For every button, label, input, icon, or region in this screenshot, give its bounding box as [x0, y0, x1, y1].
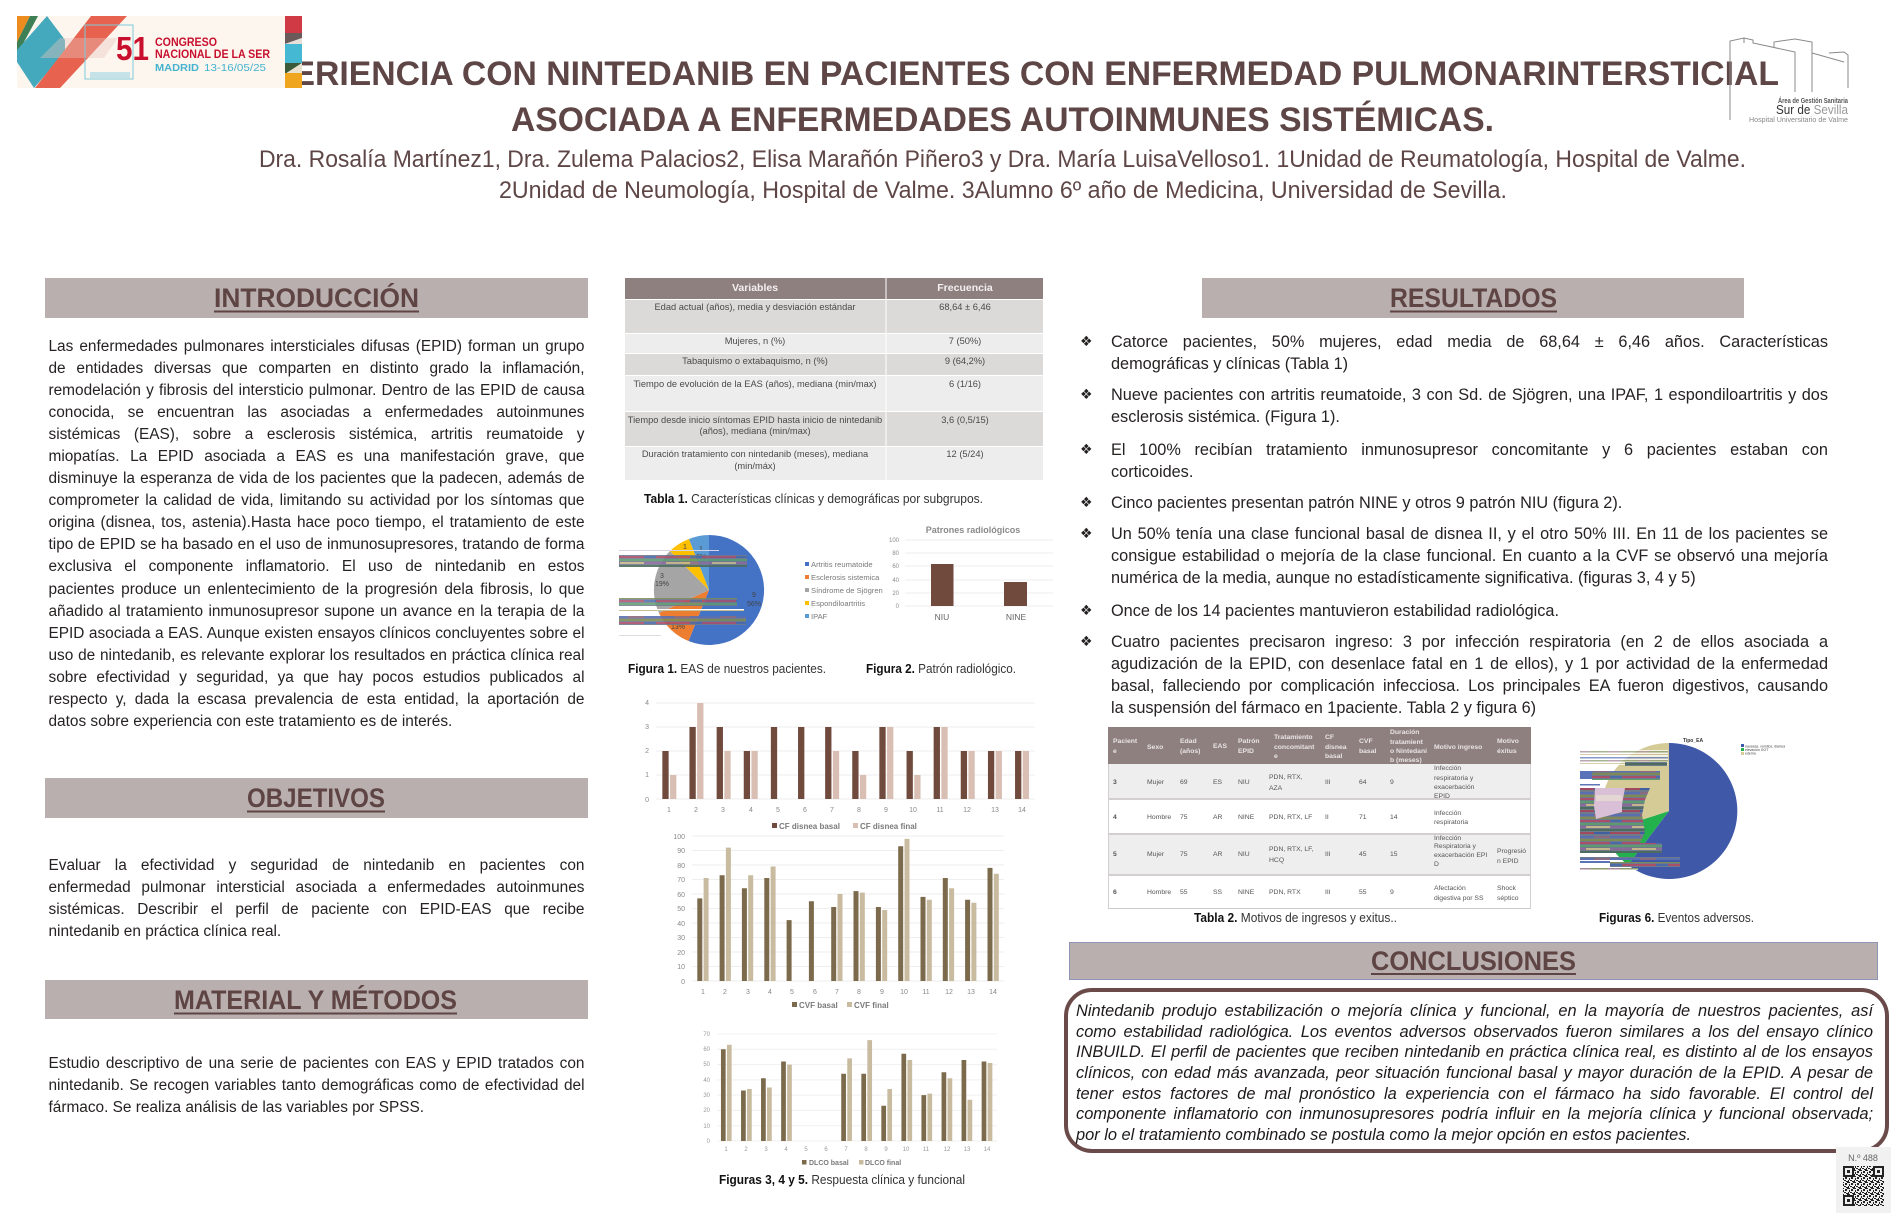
- text: introducción: de entidades diversas que comparten en distinto grado la inflamación,: [48, 360, 584, 377]
- text: resultado 5: consigue estabilidad o mejoría de la clase funcional. En cuanto a la CVF se observó una mejoría: [1111, 547, 1828, 565]
- chart: figura 5 dlco: 30: [703, 1093, 711, 1099]
- chart: figura 4 cvf: 14: [989, 989, 997, 996]
- chart: figura 4 cvf: 80: [677, 863, 685, 870]
- chart: figura 4 cvf: 1: [701, 989, 705, 996]
- logo: congress: CONGRESO: [155, 37, 217, 49]
- chart: figura 4 cvf: 50: [677, 906, 685, 913]
- table 1: Variables: [732, 282, 778, 294]
- text: resultado 6: Once de los 14 pacientes mantuvieron estabilidad radiológica.: [1111, 602, 1559, 620]
- chart: figura 3 cf disnea: 14: [1018, 807, 1026, 814]
- text: introducción: remodelación y fibrosis del intersticio pulmonar. Dentro de las EPID de causa: [48, 382, 584, 399]
- chart: figura 5 dlco: 60: [703, 1047, 711, 1053]
- table 2: NIU: [1238, 779, 1250, 786]
- table 2: Shock: [1497, 885, 1516, 892]
- panel: conclusion box: [1066, 990, 1887, 1151]
- table 1: 9 (64,2%): [945, 356, 985, 366]
- authors: 2Unidad de Neumología, Hospital de Valme. 3Alumno 6º año de Medicina, Universidad de Sevilla.: [499, 177, 1507, 204]
- chart: figura 2 bars: NINE: [1006, 612, 1026, 622]
- table 2: tratamient: [1390, 739, 1424, 746]
- chart: figura 4 cvf: 20: [677, 950, 685, 957]
- text: resultado 7: Cuatro pacientes precisaron ingreso: 3 por infección respiratoria (en 2 de ellos asociada a: [1111, 633, 1828, 651]
- chart: figura 6 pie: Tipo_EA: [1683, 738, 1703, 744]
- table 2: Edad: [1180, 738, 1197, 745]
- table 2: 4: [1113, 814, 1117, 821]
- legend: figura 1: IPAF: [811, 612, 828, 621]
- chart: figura 3 cf disnea: 1: [667, 807, 671, 814]
- text: introducción: datos sobre experiencia con este tratamiento es de interés.: [48, 713, 452, 730]
- table 2: basal: [1359, 748, 1376, 755]
- chart: figura 4 cvf: 70: [677, 877, 685, 884]
- text: introducción: sobre efectividad y seguridad, ya que hay pocos estudios publicados al: [48, 669, 584, 686]
- chart: figura 3 cf disnea: CF disnea basal: [779, 822, 840, 831]
- text: material y métodos: [48, 1055, 584, 1116]
- chart: figura 4 cvf: 13: [967, 989, 975, 996]
- qr code: N.º 488: [1848, 1153, 1878, 1163]
- logo: hospital: Sur de Sevilla: [1776, 102, 1849, 117]
- table 2: Hombre: [1147, 889, 1171, 896]
- chart: figura 5 dlco: 6: [824, 1147, 828, 1153]
- chart: figura 4 cvf: 5: [790, 989, 794, 996]
- table 2: PDN, RTX: [1269, 889, 1301, 896]
- text: ❖: [1080, 495, 1093, 511]
- table 2: (años): [1180, 748, 1200, 755]
- legend: figura 1: Esclerosis sistemica: [811, 573, 880, 582]
- logo: congress: [17, 16, 302, 88]
- chart: figura 4 cvf: CVF final: [854, 1001, 889, 1010]
- chart: figura 3 cf disnea: 3: [645, 724, 649, 731]
- table 2: ES: [1213, 779, 1223, 786]
- table 2: CVF: [1359, 738, 1373, 745]
- text: resultado 4: Cinco pacientes presentan patrón NINE y otros 9 patrón NIU (figura 2).: [1111, 494, 1622, 512]
- chart: figura 3 cf disnea: 3: [721, 807, 725, 814]
- chart: figura 5 dlco: 3: [764, 1147, 768, 1153]
- chart: figura 4 cvf: 100: [673, 834, 685, 841]
- chart: figura 6 pie: [1580, 738, 1785, 879]
- chart: figura 5 dlco: 70: [703, 1032, 711, 1038]
- table 2: respiratoria y: [1434, 775, 1474, 782]
- table 1: Frecuencia: [937, 282, 993, 294]
- table 2: o Nintedani: [1390, 748, 1427, 755]
- table 2: 5: [1113, 851, 1117, 858]
- authors: [259, 146, 1746, 204]
- chart: figura 5 dlco: 0: [707, 1139, 711, 1145]
- heading: resultados: [1202, 278, 1744, 318]
- table 2: PDN, RTX,: [1269, 774, 1303, 781]
- table 2: HCQ: [1269, 857, 1284, 864]
- chart: figura 5 dlco: 2: [744, 1147, 748, 1153]
- table 2: 45: [1359, 851, 1367, 858]
- table 2: concomitant: [1274, 744, 1315, 751]
- text: resultado 7: agudización de la EPID, con desenlace fatal en 1 de ellos), y 1 por actividad de la enfermedad: [1111, 655, 1828, 673]
- text: conclusiones: por lo el tratamiento combinado se postula como la mejor opción en estos pacientes.: [1076, 1126, 1691, 1144]
- chart: figura 2 bars: 0: [896, 604, 900, 610]
- caption: figura 2: Figura 2. Patrón radiológico.: [866, 661, 1016, 676]
- logo: congress: MADRID: [155, 62, 199, 74]
- chart: figura 6 pie: edema: [1745, 752, 1756, 756]
- text: resultado 7: [1080, 633, 1828, 717]
- text: ❖: [1080, 526, 1093, 542]
- chart: figura 4 cvf: 10: [900, 989, 908, 996]
- chart: figura 4 cvf: 11: [922, 989, 930, 996]
- chart: figura 1 pie: 1: [683, 544, 687, 551]
- title: [225, 55, 1779, 139]
- table 2: D: [1434, 861, 1439, 868]
- heading: material y métodos: [45, 980, 588, 1019]
- table 2: Patrón: [1238, 738, 1260, 745]
- chart: figura 4 cvf: 9: [880, 989, 884, 996]
- chart: figura 3 cf disnea: CF disnea final: [860, 822, 917, 831]
- chart: figura 5 dlco: 11: [923, 1147, 930, 1153]
- chart: figura 5 dlco: 10: [903, 1147, 910, 1153]
- chart: figura 3 cf disnea: 1: [645, 772, 649, 779]
- text: objetivos: nintedanib en práctica clínica real.: [48, 923, 281, 940]
- table 2: Pacient: [1113, 738, 1138, 745]
- chart: figura 4 cvf: 0: [681, 979, 685, 986]
- chart: figura 5 dlco: 40: [703, 1078, 711, 1084]
- logo: congress: 13-16/05/25: [204, 62, 266, 74]
- table 2: III: [1325, 889, 1331, 896]
- text: introducción: comprometer la calidad de vida, limitando su actividad por los síntomas que: [48, 492, 584, 509]
- table 2: exacerbación: [1434, 784, 1475, 791]
- chart: figura 5 dlco: 12: [944, 1147, 951, 1153]
- table 2: 75: [1180, 851, 1188, 858]
- table 2: PDN, RTX, LF,: [1269, 846, 1314, 853]
- chart: figura 4 cvf: 40: [677, 921, 685, 928]
- text: conclusiones: componente inflamatorio con inmunosupresores podría influir en la mejoría clínica y funcional observada;: [1076, 1105, 1873, 1123]
- chart: figura 3 cf disnea: 2: [694, 807, 698, 814]
- text: conclusiones: [1076, 1002, 1874, 1144]
- chart: figura 5 dlco: 13: [964, 1147, 971, 1153]
- heading: resultados: RESULTADOS: [1390, 283, 1557, 313]
- text: ❖: [1080, 603, 1093, 619]
- text: introducción: EPID asociada a EAS. Aunque existen ensayos clínicos concluyentes sobre el: [48, 625, 584, 642]
- table 2: exacerbación EPI: [1434, 852, 1487, 859]
- table 2: PDN, RTX, LF: [1269, 814, 1312, 821]
- text: introducción: sistémicas (EAS), sobre a esclerosis sistémica, artritis reumatoide y: [48, 426, 584, 443]
- text: resultado 5: [1080, 525, 1828, 587]
- chart: figura 3 cf disnea: 7: [830, 807, 834, 814]
- table 1: Duración tratamiento con nintedanib (meses), mediana: [642, 449, 869, 459]
- table 2: CF: [1325, 734, 1334, 741]
- text: resultado 3: El 100% recibían tratamiento inmunosupresor concomitante y 6 pacientes estaban con: [1111, 440, 1828, 458]
- table 2: Tratamiento: [1274, 734, 1313, 741]
- heading: objetivos: [45, 778, 588, 818]
- chart: figura 4 cvf: 12: [945, 989, 953, 996]
- table 2: Afectación: [1434, 885, 1466, 892]
- table 2: NIU: [1238, 851, 1250, 858]
- table 2: EAS: [1213, 743, 1227, 750]
- table 2: AZA: [1269, 785, 1283, 792]
- chart: figura 2 bars: 60: [892, 564, 900, 570]
- table 2: NINE: [1238, 814, 1255, 821]
- text: conclusiones: Nintedanib produjo estabilización o mejoría clínica y funcional, en la mayoría de nuestros pacientes, así: [1076, 1002, 1873, 1020]
- chart: figura 2 bars: Patrones radiológicos: [926, 525, 1020, 535]
- table 2: [1108, 727, 1531, 909]
- chart: figura 6 pie: nauseas, vómitos, diarrea: [1745, 744, 1785, 748]
- chart: figura 3 cf disnea: 12: [963, 807, 971, 814]
- text: resultado 1: Catorce pacientes, 50% mujeres, edad media de 68,64 ± 6,46 años. Características: [1111, 333, 1828, 351]
- table 2: e: [1274, 753, 1278, 760]
- table 1: Mujeres, n (%): [725, 336, 785, 346]
- text: resultado 7: la suspensión del fármaco en 1paciente. Tabla 2 y figura 6): [1111, 699, 1536, 717]
- authors: Dra. Rosalía Martínez1, Dra. Zulema Palacios2, Elisa Marañón Piñero3 y Dra. María LuisaVelloso1. 1Unidad de Reumatología, Hospital de Valme.: [259, 146, 1746, 173]
- chart: figura 3 cf disnea: 4: [645, 700, 649, 707]
- text: introducción: tipo de EPID se ha basado en el uso de inmunosupresores, tratando de forma: [48, 536, 584, 553]
- caption: figuras 6: Figuras 6. Eventos adversos.: [1599, 910, 1754, 925]
- table 2: respiratoria: [1434, 819, 1468, 826]
- chart: figura 4 cvf: 60: [677, 892, 685, 899]
- text: ❖: [1080, 387, 1093, 403]
- text: ❖: [1080, 442, 1093, 458]
- chart: figura 4 cvf: 30: [677, 935, 685, 942]
- table 2: SS: [1213, 889, 1223, 896]
- title: EXPERIENCIA CON NINTEDANIB EN PACIENTES CON ENFERMEDAD PULMONARINTERSTICIAL: [225, 55, 1779, 93]
- text: material y métodos: nintedanib. Se recogen variables tanto demográficas como de efectividad del: [48, 1077, 584, 1094]
- text: introducción: uso de nintedanib, es relevante explorar los resultados en práctica clínica real: [48, 647, 584, 664]
- chart: figura 5 dlco: 9: [884, 1147, 888, 1153]
- chart: figura 1 pie: 9: [752, 592, 756, 599]
- text: introducción: pacientes produce un enlentecimiento de la progresión dela fibrosis, lo que: [48, 581, 584, 598]
- table 2: EPID: [1434, 793, 1450, 800]
- legend: figura 1: Espondiloartritis: [811, 599, 865, 608]
- table 1: Tiempo de evolución de la EAS (años), mediana (min/max): [633, 379, 877, 389]
- chart: figura 5 dlco: 50: [703, 1062, 711, 1068]
- caption: figuras 3, 4 y 5: Figuras 3, 4 y 5. Respuesta clínica y funcional: [719, 1172, 965, 1187]
- table 1: 3,6 (0,5/15): [941, 415, 989, 425]
- text: resultado 7: basal, falleciendo por complicación infecciosa. Los principales EA fueron digestivos, causando: [1111, 677, 1828, 695]
- table 2: AR: [1213, 851, 1223, 858]
- table 2: disnea: [1325, 744, 1347, 751]
- chart: figura 5 dlco: 5: [804, 1147, 808, 1153]
- text: objetivos: enfermedad pulmonar intersticial asociada a enfermedades autoinmunes: [48, 879, 584, 896]
- chart: figura 4 cvf: 90: [677, 848, 685, 855]
- chart: figura 5 dlco: 20: [703, 1108, 711, 1114]
- table 2: Sexo: [1147, 744, 1163, 751]
- table 1: 12 (5/24): [946, 449, 984, 459]
- logo: congress: 51: [116, 30, 149, 67]
- text: material y métodos: Estudio descriptivo de una serie de pacientes con EAS y EPID tratados con: [48, 1055, 584, 1072]
- text: resultado 1: demográficas y clínicas (Tabla 1): [1111, 355, 1348, 373]
- text: introducción: miopatías. La EPID asociada a EAS es una manifestación grave, que: [48, 448, 584, 465]
- table 2: AR: [1213, 814, 1223, 821]
- legend: figura 1: [805, 560, 883, 621]
- text: introducción: Las enfermedades pulmonares intersticiales difusas (EPID) forman un grupo: [48, 338, 584, 355]
- chart: figura 4 cvf: 10: [677, 964, 685, 971]
- table 2: 15: [1390, 851, 1398, 858]
- table 2: EPID: [1238, 748, 1254, 755]
- chart: figura 5 dlco: 14: [984, 1147, 991, 1153]
- heading: conclusiones: CONCLUSIONES: [1371, 946, 1576, 976]
- text: introducción: origina (disnea, tos, astenia).Hasta hace poco tiempo, el tratamiento de este: [48, 514, 584, 531]
- text: conclusiones: tener estos factores de mal pronóstico la experiencia con el fármaco ha sido favorable. El control del: [1076, 1085, 1873, 1103]
- chart: figura 5 dlco: DLCO final: [865, 1160, 901, 1167]
- table 1: (años), mediana (min/max): [699, 426, 811, 436]
- heading: material y métodos: MATERIAL Y MÉTODOS: [174, 984, 457, 1015]
- heading: introducción: [45, 278, 588, 318]
- table 2: Infección: [1434, 810, 1461, 817]
- table 2: séptico: [1497, 895, 1519, 902]
- table 2: digestiva por SS: [1434, 895, 1484, 902]
- chart: figura 3 cf disnea: 0: [645, 797, 649, 804]
- chart: figura 3 cf disnea: 11: [936, 807, 944, 814]
- table 2: Motivo: [1497, 738, 1519, 745]
- qr code: [1836, 1147, 1891, 1213]
- table 1: Tabaquismo o extabaquismo, n (%): [682, 356, 828, 366]
- chart: figura 2 bars: 20: [892, 591, 900, 597]
- table 1: 7 (50%): [949, 336, 981, 346]
- chart: figura 1 pie: 19%: [655, 581, 669, 588]
- table 2: 9: [1390, 889, 1394, 896]
- text: resultado 2: [1080, 386, 1828, 426]
- title: ASOCIADA A ENFERMEDADES AUTOINMUNES SISTÉMICAS.: [511, 101, 1494, 139]
- chart: figura 3 cf disnea: 10: [909, 807, 917, 814]
- chart: figura 2 bars: 40: [892, 578, 900, 584]
- caption: tabla 1: Tabla 1. Características clínicas y demográficas por subgrupos.: [644, 491, 983, 506]
- table 2: b (meses): [1390, 757, 1422, 764]
- table 2: éxitus: [1497, 748, 1517, 755]
- table 2: 75: [1180, 814, 1188, 821]
- chart: figura 4 cvf: 8: [857, 989, 861, 996]
- chart: figura 5 dlco: DLCO basal: [809, 1160, 849, 1167]
- table 2: Respiratoria y: [1434, 843, 1477, 850]
- table 2: n EPID: [1497, 858, 1519, 865]
- chart: figura 5 dlco: 1: [724, 1147, 728, 1153]
- logo: hospital: Hospital Universitario de Valme: [1749, 117, 1848, 124]
- table 2: 6: [1113, 889, 1117, 896]
- logo: hospital: Área de Gestión Sanitaria: [1778, 96, 1848, 105]
- table 2: 55: [1180, 889, 1188, 896]
- chart: figura 3 cf disnea: [645, 700, 1035, 831]
- table 2: Duración: [1390, 729, 1419, 736]
- chart: figura 1 pie: 56%: [747, 601, 761, 608]
- chart: figura 4 cvf: 2: [723, 989, 727, 996]
- table 2: NINE: [1238, 889, 1255, 896]
- text: conclusiones: clínicos, con edad más avanzada, peor situación funcional basal y mayor duración de la EPID. A pesar de: [1076, 1064, 1873, 1082]
- text: introducción: respecto y, dada la escasa prevalencia de esta entidad, la aportación de: [48, 691, 584, 708]
- table 1: 68,64 ± 6,46: [939, 302, 991, 312]
- table 2: basal: [1325, 753, 1342, 760]
- table 2: Mujer: [1147, 779, 1165, 786]
- table 1: Tiempo desde inicio síntomas EPID hasta inicio de nintedanib: [628, 415, 882, 425]
- chart: figura 3 cf disnea: 9: [884, 807, 888, 814]
- table 2: Infección: [1434, 765, 1461, 772]
- table 2: 64: [1359, 779, 1367, 786]
- chart: figura 2 bars: 80: [892, 551, 900, 557]
- table 2: 3: [1113, 779, 1117, 786]
- text: resultado 1: [1080, 333, 1828, 373]
- chart: figura 3 cf disnea: 2: [645, 748, 649, 755]
- legend: figura 1: Síndrome de Sjögren: [811, 586, 883, 595]
- text: introducción: disminuye la esperanza de vida de los pacientes que la padecen, además de: [48, 470, 584, 487]
- chart: figura 4 cvf: 7: [835, 989, 839, 996]
- text: resultado 5: numérica de la media, aunque no estadísticamente significativa. (figuras 3, 4 y 5): [1111, 569, 1696, 587]
- text: resultado 2: Nueve pacientes con artritis reumatoide, 3 con Sd. de Sjögren, una IPAF, 1 espondiloartritis y dos: [1111, 386, 1828, 404]
- text: resultado 5: Un 50% tenía una clase funcional basal de disnea II, y el otro 50% III. En 11 de los pacientes se: [1111, 525, 1828, 543]
- table 2: Motivo ingreso: [1434, 744, 1482, 751]
- table 2: II: [1325, 814, 1329, 821]
- logo: congress: NACIONAL DE LA SER: [155, 49, 271, 61]
- chart: figura 2 bars: NIU: [935, 612, 949, 622]
- table 2: Mujer: [1147, 851, 1165, 858]
- chart: figura 1 pie: 6%: [696, 554, 706, 561]
- table 2: Infección: [1434, 835, 1461, 842]
- heading: objetivos: OBJETIVOS: [247, 783, 385, 813]
- chart: figura 1 pie: 3: [660, 573, 664, 580]
- text: introducción: exclusiva el componente inflamatorio. El uso de nintedanib en estos: [48, 558, 584, 575]
- table 2: 55: [1359, 889, 1367, 896]
- text: resultado 3: corticoides.: [1111, 463, 1193, 481]
- chart: figura 5 dlco: 7: [844, 1147, 848, 1153]
- chart: figura 6 pie: elevación GOT: [1745, 748, 1769, 752]
- table 1: 6 (1/16): [949, 379, 981, 389]
- chart: figura 3 cf disnea: 6: [803, 807, 807, 814]
- chart: figura 2 bars: [889, 525, 1053, 622]
- chart: figura 3 cf disnea: 4: [749, 807, 753, 814]
- chart: figura 2 bars: 100: [889, 538, 900, 544]
- caption: figura 1: Figura 1. EAS de nuestros pacientes.: [628, 661, 826, 676]
- chart: figura 3 cf disnea: 5: [776, 807, 780, 814]
- table 1: Edad actual (años), media y desviación estándar: [654, 302, 856, 312]
- chart: figura 4 cvf: 6: [813, 989, 817, 996]
- text: objetivos: Evaluar la efectividad y seguridad de nintedanib en pacientes con: [48, 857, 584, 874]
- text: introducción: [48, 338, 585, 730]
- caption: tabla 2: Tabla 2. Motivos de ingresos y exitus..: [1194, 910, 1397, 925]
- legend: figura 1: Artritis reumatoide: [811, 560, 873, 569]
- chart: figura 4 cvf: CVF basal: [799, 1001, 838, 1010]
- chart: figura 5 dlco: 10: [703, 1124, 711, 1130]
- logo: hospital: [1730, 38, 1849, 124]
- text: material y métodos: fármaco. Se realiza análisis de las variables por SPSS.: [48, 1099, 424, 1116]
- table 1: (min/máx): [734, 461, 776, 471]
- text: ❖: [1080, 634, 1093, 650]
- table 2: e: [1113, 748, 1117, 755]
- chart: figura 1 pie: 1: [699, 546, 703, 553]
- chart: figura 5 dlco: 4: [784, 1147, 788, 1153]
- text: conclusiones: INBUILD. El perfil de pacientes que reciben nintedanib en práctica clínica real, es distinto al de los ensayos: [1076, 1043, 1873, 1061]
- table 2: III: [1325, 851, 1331, 858]
- table 2: Hombre: [1147, 814, 1171, 821]
- text: resultado 3: [1080, 440, 1828, 481]
- chart: figura 5 dlco: [703, 1032, 997, 1167]
- table 2: Progresió: [1497, 848, 1526, 855]
- text: introducción: conocida, se encuentran las asociadas a enfermedades autoinmunes: [48, 404, 584, 421]
- table 2: III: [1325, 779, 1331, 786]
- chart: figura 3 cf disnea: 8: [857, 807, 861, 814]
- chart: figura 3 cf disnea: 13: [991, 807, 999, 814]
- heading: conclusiones: [1070, 942, 1878, 980]
- chart: figura 1 pie: 13%: [671, 624, 685, 631]
- text: objetivos: sistémicas. Describir el perfil de paciente con EPID-EAS que recibe: [48, 901, 584, 918]
- text: resultado 2: esclerosis sistémica. (Figura 1).: [1111, 408, 1340, 426]
- chart: figura 4 cvf: 4: [768, 989, 772, 996]
- chart: figura 1 pie: [619, 535, 764, 645]
- chart: figura 5 dlco: 8: [864, 1147, 868, 1153]
- chart: figura 4 cvf: [673, 834, 1004, 1010]
- text: introducción: añadido al tratamiento inmunosupresor supone un avance en la terapia de la: [48, 603, 584, 620]
- table 1: [625, 278, 1043, 480]
- table 2: 69: [1180, 779, 1188, 786]
- text: ❖: [1080, 334, 1093, 350]
- table 2: 71: [1359, 814, 1367, 821]
- table 2: 9: [1390, 779, 1394, 786]
- text: conclusiones: como estabilidad radiológica. Los eventos adversos observados fueron similares a los del ensayo clínico: [1076, 1023, 1873, 1041]
- table 2: 14: [1390, 814, 1398, 821]
- heading: introducción: INTRODUCCIÓN: [214, 282, 419, 313]
- chart: figura 4 cvf: 3: [746, 989, 750, 996]
- text: objetivos: [48, 857, 584, 940]
